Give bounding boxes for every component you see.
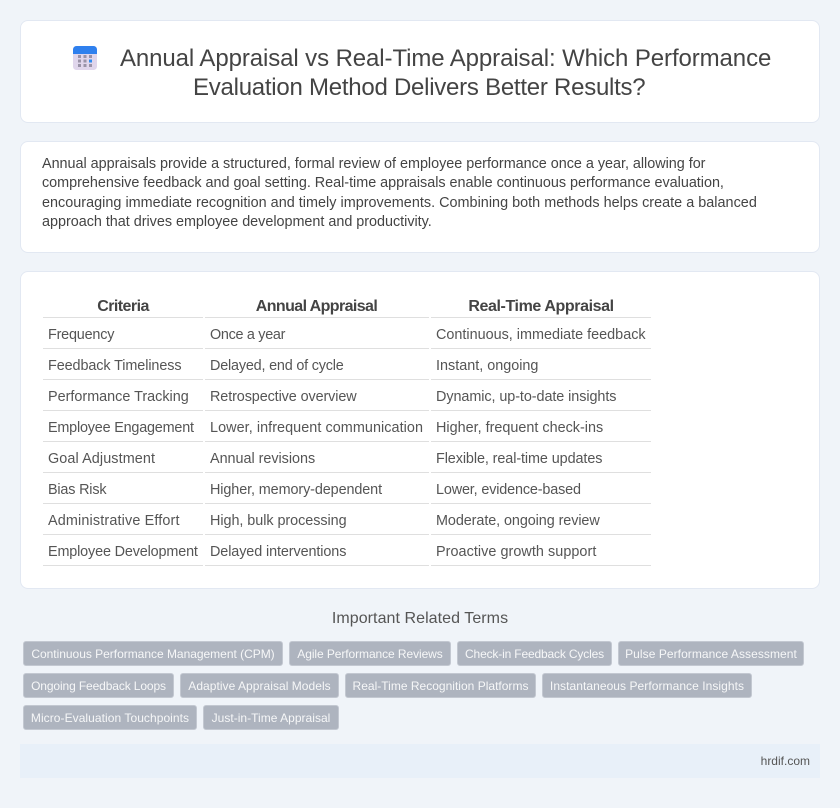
- footer: [20, 744, 820, 778]
- row: Administrative Effort: Administrative Effort: [48, 513, 180, 529]
- intro text: [42, 156, 757, 230]
- tags: related terms: Pulse Performance Assessment: [625, 647, 797, 661]
- tags: related terms: Continuous Performance Management (CPM): [31, 647, 275, 661]
- title: Annual Appraisal vs Real-Time Appraisal: Which Performance: [120, 45, 771, 72]
- tags: related terms: Adaptive Appraisal Models: [188, 679, 331, 693]
- row: Administrative Effort: Moderate, ongoing review: [436, 513, 600, 529]
- row: Employee Engagement: Employee Engagement: [48, 420, 194, 436]
- row: Bias Risk: Lower, evidence-based: [436, 482, 581, 498]
- tags: related terms: Instantaneous Performance Insights: [550, 679, 744, 693]
- row: Feedback Timeliness: Instant, ongoing: [436, 358, 538, 374]
- tags: related terms: Ongoing Feedback Loops: [31, 679, 166, 693]
- tags: related terms: Micro-Evaluation Touchpoints: [31, 711, 189, 725]
- table header: [97, 298, 614, 315]
- heading: related terms: Important Related Terms: [332, 610, 508, 627]
- icon: calendar: [73, 46, 97, 70]
- row: Administrative Effort: High, bulk processing: [210, 513, 347, 529]
- row: Performance Tracking: Performance Tracking: [48, 389, 189, 405]
- row: Employee Development: [48, 544, 596, 560]
- table header: Real-Time Appraisal: [468, 298, 614, 315]
- footer source: hrdif.com: [761, 754, 810, 768]
- row: Goal Adjustment: Goal Adjustment: [48, 451, 155, 467]
- panel: introduction: [20, 141, 820, 253]
- row: Employee Development: Employee Development: [48, 544, 198, 560]
- intro text: Annual appraisals provide a structured, formal review of employee performance once a year, allowing for: [42, 156, 705, 172]
- row: Employee Engagement: Lower, infrequent communication: [210, 420, 423, 436]
- tags: related terms: Just-in-Time Appraisal: [212, 711, 330, 725]
- panel: header: [20, 20, 820, 123]
- row: Administrative Effort: [48, 513, 600, 529]
- tags: related terms: [23, 641, 804, 730]
- row: Employee Engagement: [48, 420, 603, 436]
- row: Goal Adjustment: Annual revisions: [210, 451, 315, 467]
- row: Performance Tracking: Dynamic, up-to-date insights: [436, 389, 616, 405]
- row: Bias Risk: Higher, memory-dependent: [210, 482, 382, 498]
- tags: related terms: Check-in Feedback Cycles: [465, 647, 604, 661]
- intro text: comprehensive feedback and goal setting. Real-time appraisals enable continuous performance evaluation,: [42, 175, 724, 191]
- comparison table: [43, 298, 651, 566]
- row: Feedback Timeliness: Delayed, end of cycle: [210, 358, 344, 374]
- panel: comparison table: [20, 271, 820, 589]
- row: Employee Engagement: Higher, frequent check-ins: [436, 420, 603, 436]
- row: Performance Tracking: [48, 389, 616, 405]
- row: Frequency: Continuous, immediate feedback: [436, 327, 646, 343]
- row: Goal Adjustment: Flexible, real-time updates: [436, 451, 602, 467]
- intro text: approach that drives employee development and productivity.: [42, 214, 432, 230]
- table header: Criteria: [97, 298, 149, 315]
- row: Feedback Timeliness: Feedback Timeliness: [48, 358, 181, 374]
- tags: related terms: Agile Performance Reviews: [297, 647, 443, 661]
- row: Goal Adjustment: [48, 451, 602, 467]
- row: Bias Risk: [48, 482, 581, 498]
- title: Evaluation Method Delivers Better Results?: [193, 74, 645, 101]
- table header: Annual Appraisal: [256, 298, 377, 315]
- row: Employee Development: Proactive growth support: [436, 544, 596, 560]
- row: Frequency: Once a year: [210, 327, 285, 343]
- row: Frequency: Frequency: [48, 327, 114, 343]
- row: Bias Risk: Bias Risk: [48, 482, 106, 498]
- intro text: encouraging immediate recognition and timely improvements. Combining both methods helps create a balanced: [42, 195, 757, 211]
- row: Performance Tracking: Retrospective overview: [210, 389, 357, 405]
- tags: related terms: Real-Time Recognition Platforms: [353, 679, 528, 693]
- row: Frequency: [48, 327, 646, 343]
- row: Employee Development: Delayed interventions: [210, 544, 346, 560]
- title: [120, 45, 771, 101]
- row: Feedback Timeliness: [48, 358, 538, 374]
